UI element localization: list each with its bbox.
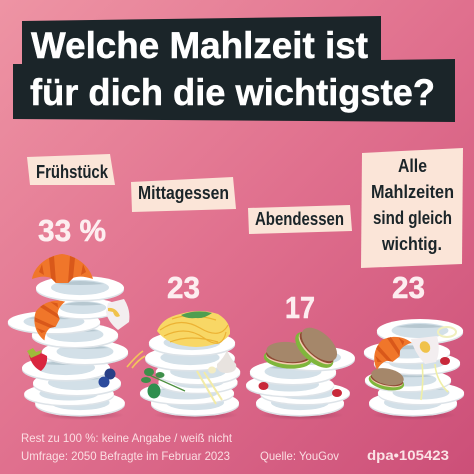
label: Alle Mahlzeiten sind gleich wichtig: sind gleich xyxy=(373,207,452,228)
icon: croissant top xyxy=(32,254,93,283)
label: Mittagessen: Mittagessen xyxy=(138,183,229,203)
icon: pale strands right xyxy=(197,371,222,404)
icon: tomato xyxy=(440,357,450,365)
icon: pale strands xyxy=(421,364,448,400)
source: Quelle: YouGov xyxy=(260,449,339,463)
icon: strands of spaghetti left xyxy=(127,351,145,368)
title: für dich die wichtigste? xyxy=(30,72,435,113)
footnote: Umfrage: 2050 Befragte im Februar 2023 xyxy=(21,449,230,463)
label: Alle Mahlzeiten sind gleich wichtig xyxy=(361,148,463,268)
label: Abendessen xyxy=(248,205,352,234)
icon: basil sprig xyxy=(141,368,185,398)
label: Alle Mahlzeiten sind gleich wichtig: wichtig. xyxy=(381,233,442,254)
icon: sandwich right xyxy=(289,320,344,374)
plate stack: all meals xyxy=(364,319,464,420)
icon: blueberries xyxy=(98,368,116,388)
icon: croissant side xyxy=(26,292,68,342)
label: Frühstück: Frühstück xyxy=(36,162,109,182)
icon: egg xyxy=(106,299,129,330)
value: 23 all: 23 xyxy=(392,270,425,305)
icon: sandwich xyxy=(367,365,407,393)
label: Alle Mahlzeiten sind gleich wichtig: Alle xyxy=(398,155,427,176)
icon: strawberry xyxy=(27,348,47,371)
label: Mittagessen xyxy=(131,177,236,212)
title: Welche Mahlzeit ist xyxy=(31,25,368,66)
footnote: Rest zu 100 %: keine Angabe / weiß nicht xyxy=(21,431,233,445)
icon: croissant xyxy=(365,327,414,372)
icon: garlic xyxy=(208,350,236,374)
icon: egg xyxy=(411,336,439,364)
icon: pale ring xyxy=(438,327,456,337)
value: 23 lunch: 23 xyxy=(167,270,200,305)
label: Abendessen: Abendessen xyxy=(255,209,344,229)
icon: spaghetti xyxy=(157,311,230,347)
icon: tomato left xyxy=(258,382,268,390)
icon: tomato right xyxy=(332,389,342,397)
label: Frühstück xyxy=(27,154,115,185)
footnote xyxy=(21,431,233,463)
plate stack: breakfast xyxy=(8,254,129,420)
value: 17: 17 xyxy=(285,290,315,325)
title xyxy=(13,16,455,122)
icon: sandwich left xyxy=(263,340,313,371)
value: 33 %: 33 % xyxy=(38,213,106,248)
plate stack: lunch xyxy=(127,311,240,420)
plate stack: dinner xyxy=(246,320,355,420)
label: Alle Mahlzeiten sind gleich wichtig: Mahlzeiten xyxy=(371,181,454,202)
credit: dpa: dpa•105423 xyxy=(367,447,449,463)
